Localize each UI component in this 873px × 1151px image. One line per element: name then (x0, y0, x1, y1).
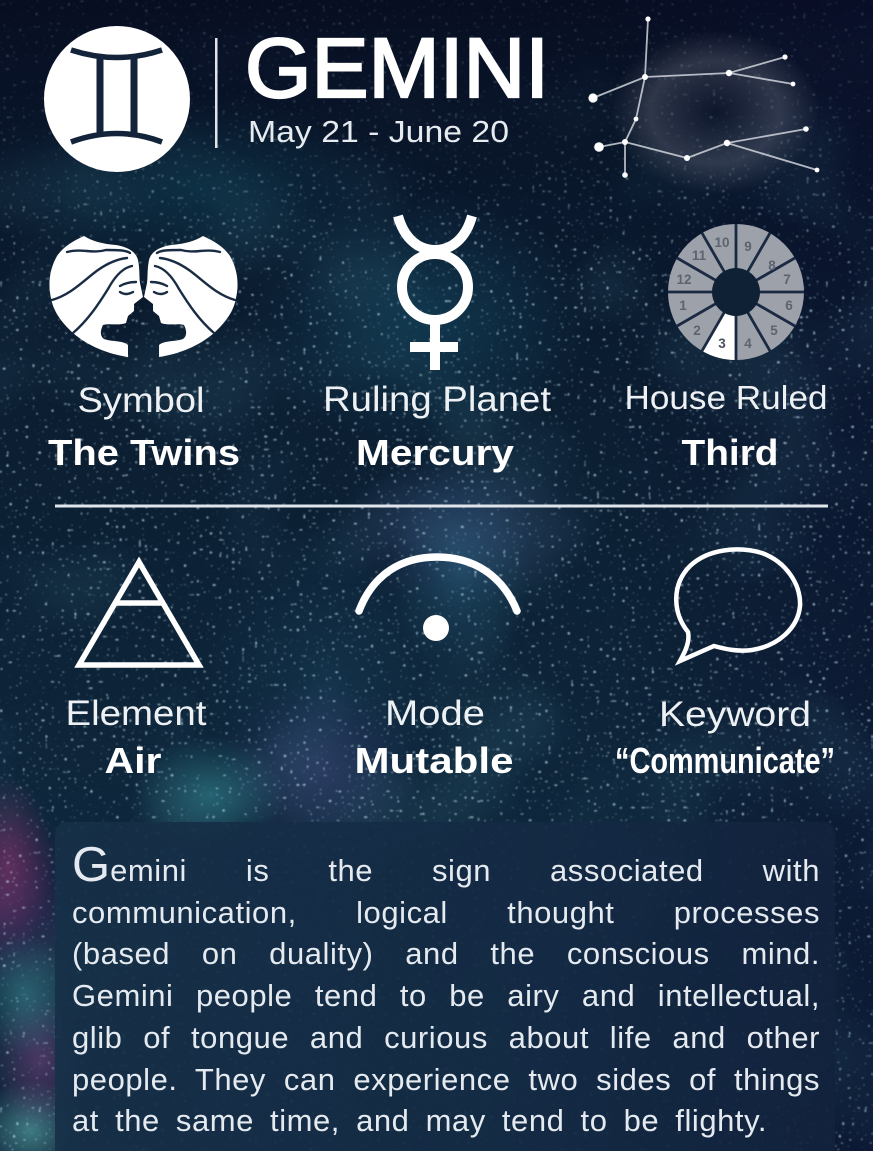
description text: glib of tongue and curious about life and other (72, 1020, 820, 1055)
icon: air triangle (79, 562, 199, 665)
description text: people. They can experience two sides of things (72, 1062, 820, 1097)
label: mode: Mode (385, 694, 485, 733)
label: ruling planet (323, 380, 551, 473)
icon: mutable mode (359, 557, 517, 641)
label: house ruled: House Ruled (624, 379, 828, 416)
description text: Gemini is the sign associated with (72, 838, 820, 892)
icon: house wheel: 1 (679, 298, 687, 313)
label: mode (354, 694, 514, 781)
icon: speech bubble (676, 549, 800, 661)
label: element: Element (66, 694, 207, 733)
title: GEMINI (245, 21, 549, 115)
icon: house wheel: 11 (692, 248, 707, 263)
icon: house wheel (668, 224, 804, 360)
icon: house wheel: 12 (676, 272, 692, 287)
icon: house wheel: 6 (785, 298, 793, 313)
icon: the twins (49, 236, 238, 357)
icon: house wheel: 7 (783, 272, 791, 287)
panel: description background (55, 822, 835, 1151)
icon: house wheel: 9 (744, 239, 752, 254)
icon: house wheel: 4 (744, 336, 752, 351)
description text: communication, logical thought processes (72, 895, 820, 930)
icon: gemini sign badge (44, 26, 190, 172)
label: keyword (615, 695, 835, 781)
label: ruling planet: Ruling Planet (323, 380, 551, 419)
label: house ruled (624, 379, 828, 473)
icon: house wheel: 8 (768, 258, 776, 273)
description text: at the same time, and may tend to be flighty. (72, 1103, 767, 1138)
label: keyword: Keyword (659, 695, 811, 734)
icon: house wheel: 5 (770, 323, 778, 338)
title divider (215, 38, 218, 148)
label: element (66, 694, 207, 781)
description text (72, 838, 820, 1138)
description text: (based on duality) and the conscious mind. (72, 936, 820, 971)
label: symbol: Symbol (78, 381, 204, 420)
date range: May 21 - June 20 (248, 114, 509, 149)
label: symbol: The Twins (48, 432, 240, 473)
constellation: gemini (588, 16, 819, 178)
icon: house wheel: 2 (693, 323, 701, 338)
label: house ruled: Third (682, 432, 778, 473)
icon: house wheel: 10 (714, 235, 730, 250)
description text: Gemini people tend to be airy and intellectual, (72, 978, 820, 1013)
label: ruling planet: Mercury (356, 432, 514, 473)
section divider (55, 504, 828, 508)
label: mode: Mutable (354, 740, 514, 781)
label: symbol (48, 381, 240, 473)
label: element: Air (104, 740, 162, 781)
constellation glow (610, 30, 820, 194)
icon: house wheel: 3 (718, 336, 726, 351)
icon: mercury (398, 216, 472, 370)
